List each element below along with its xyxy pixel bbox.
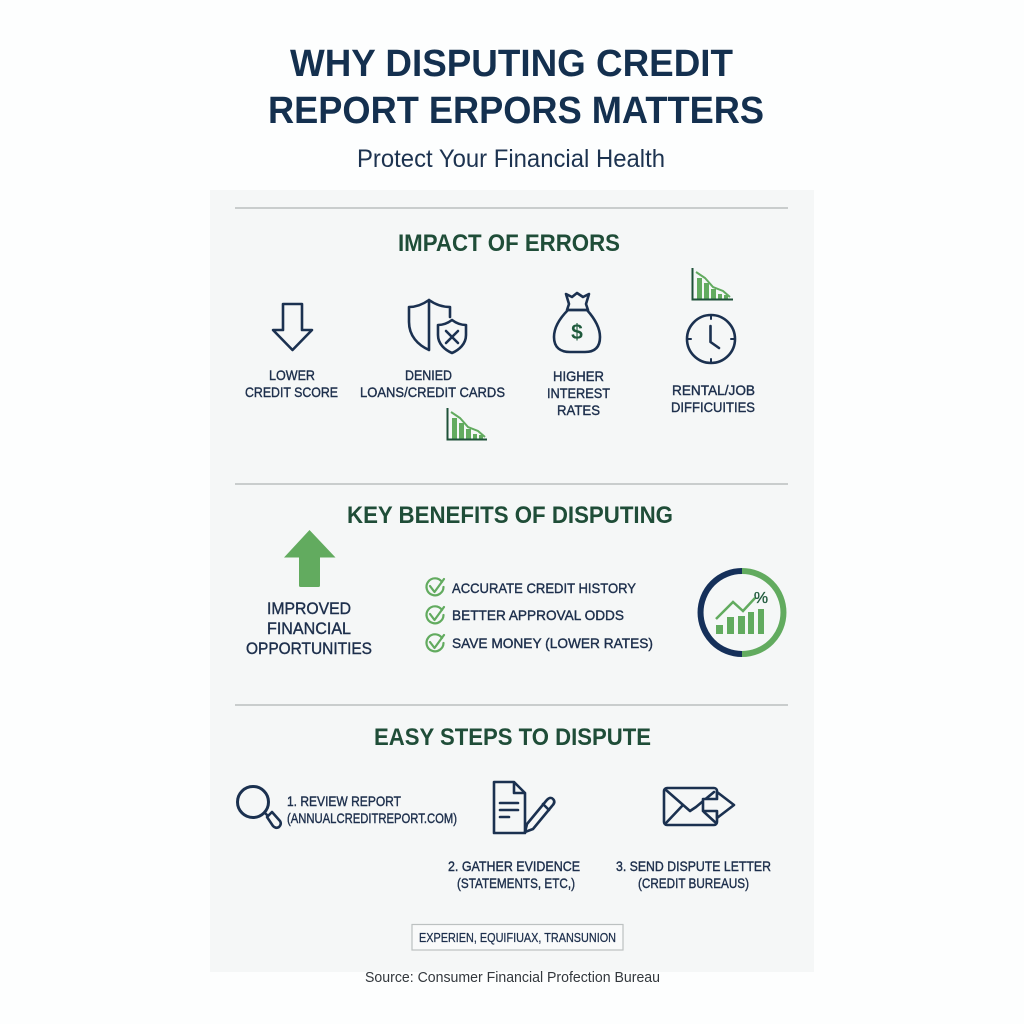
label: higher interest rates: RATES: [557, 402, 600, 418]
label: denied loans: DENIED: [405, 367, 452, 383]
icon: magnifier: [238, 786, 281, 828]
callout: credit bureaus box: EXPERIEN, EQUIFIUAX, TRANSUNION: [419, 931, 616, 945]
label: review report: 1. REVIEW REPORT: [287, 793, 401, 809]
label: denied loans: LOANS/CREDIT CARDS: [360, 384, 505, 400]
item: accurate credit history: ACCURATE CREDIT HISTORY: [452, 580, 637, 596]
label: higher interest rates: [547, 368, 610, 418]
label: gather evidence: [448, 858, 580, 891]
source note: Source: Consumer Financial Profection Bureau: [365, 970, 660, 986]
checklist: [427, 578, 653, 651]
icon: green up arrow: [284, 530, 336, 587]
icon: document with pen: [494, 782, 554, 833]
label: higher interest rates: INTEREST: [547, 385, 610, 401]
label: review report: (ANNUALCREDITREPORT.COM): [287, 810, 457, 826]
heading: key benefits: KEY BENEFITS OF DISPUTING: [347, 502, 673, 529]
label: gather evidence: (STATEMENTS, ETC,): [457, 875, 575, 891]
label: higher interest rates: HIGHER: [553, 368, 604, 384]
label: lower credit score: LOWER: [269, 367, 315, 383]
label: rental job difficulties: RENTAL/JOB: [672, 382, 755, 398]
title: WHY DISPUTING CREDIT: [290, 43, 733, 85]
icon: growth ring: %: [754, 590, 768, 607]
subtitle: Protect Your Financial Health: [357, 145, 665, 173]
label: rental job difficulties: DIFFICUITIES: [671, 399, 755, 415]
item: better approval odds: BETTER APPROVAL ODDS: [452, 607, 624, 623]
panel: key benefits: [246, 502, 783, 658]
title: [268, 43, 764, 132]
label: send dispute letter: (CREDIT BUREAUS): [638, 875, 749, 891]
heading: easy steps: EASY STEPS TO DISPUTE: [374, 724, 651, 751]
icon: falling chart top: [692, 268, 733, 300]
icon: down arrow: [273, 304, 312, 350]
label: improved financial opportunities: FINANCIAL: [267, 619, 351, 638]
title: REPORT ERPORS MATTERS: [268, 90, 764, 132]
icon: growth ring: [701, 571, 783, 654]
callout: credit bureaus box: [412, 924, 623, 950]
panel: easy steps: [238, 724, 771, 950]
icon: envelope with arrow: [664, 788, 734, 825]
icon: shield with x: [409, 300, 466, 353]
icon: money bag: [554, 293, 600, 352]
label: send dispute letter: [616, 858, 771, 891]
label: gather evidence: 2. GATHER EVIDENCE: [448, 858, 580, 874]
item: save money: SAVE MONEY (LOWER RATES): [452, 635, 653, 651]
heading: impact of errors: IMPACT OF ERRORS: [398, 230, 620, 257]
panel: impact of errors: [245, 230, 755, 440]
label: lower credit score: [245, 367, 338, 400]
label: review report: [287, 793, 457, 826]
label: rental job difficulties: [671, 382, 755, 415]
label: improved financial opportunities: [246, 599, 372, 658]
label: lower credit score: CREDIT SCORE: [245, 384, 338, 400]
icon: dollar sign: $: [571, 321, 583, 344]
panel: main card: [210, 190, 814, 972]
label: improved financial opportunities: OPPORTUNITIES: [246, 639, 372, 658]
icon: clock: [687, 315, 735, 363]
label: denied loans: [360, 367, 505, 400]
label: send dispute letter: 3. SEND DISPUTE LETTER: [616, 858, 771, 874]
icon: falling chart: [448, 408, 487, 440]
label: improved financial opportunities: IMPROVED: [267, 599, 351, 618]
